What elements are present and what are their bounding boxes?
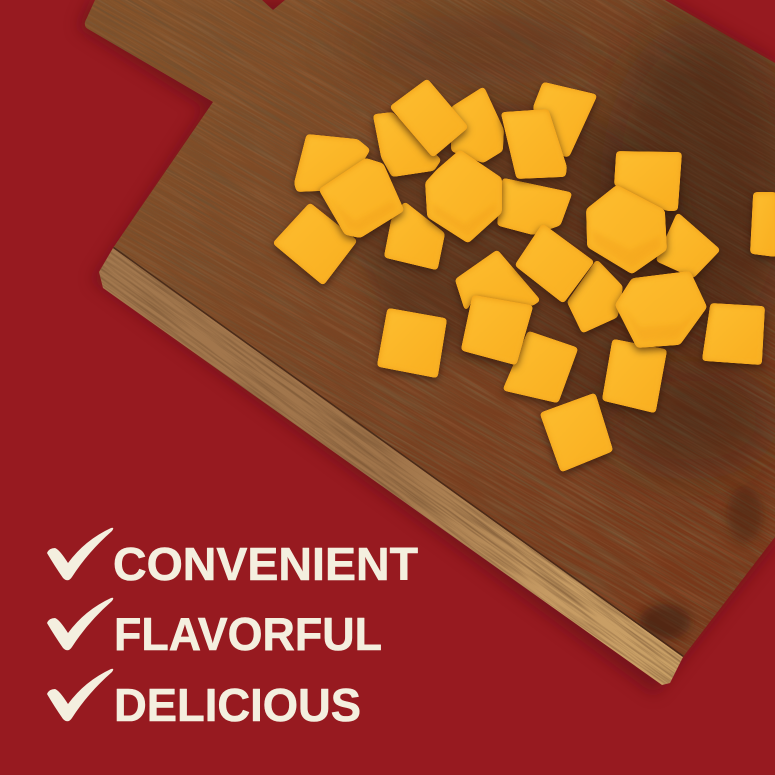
cube <box>427 152 500 241</box>
check list <box>47 528 418 731</box>
cube <box>517 226 592 301</box>
check mark: flavorful <box>47 598 113 650</box>
check mark: convenient <box>47 528 113 580</box>
cube <box>463 297 531 363</box>
cube <box>453 89 502 161</box>
check mark: delicious <box>47 669 113 721</box>
cube <box>503 111 565 177</box>
label: convenient: CONVENIENT <box>113 538 418 590</box>
board top surface <box>84 0 775 657</box>
cube <box>505 333 576 401</box>
cube <box>375 114 439 175</box>
cube <box>392 81 466 155</box>
cube <box>457 252 538 308</box>
label: delicious: DELICIOUS <box>114 679 361 731</box>
cube <box>296 136 368 190</box>
cube face shading <box>330 196 698 341</box>
cube <box>386 204 443 268</box>
cube <box>617 273 705 346</box>
cube <box>321 160 402 236</box>
label: flavorful: FLAVORFUL <box>114 608 382 660</box>
cube <box>588 187 665 272</box>
cube <box>658 215 718 276</box>
cube <box>379 310 445 376</box>
board side edge <box>99 248 683 685</box>
cube <box>752 194 775 255</box>
cube <box>604 341 665 411</box>
cube <box>569 262 621 331</box>
cutting board <box>84 0 775 685</box>
cube <box>542 395 611 470</box>
cube <box>535 84 595 155</box>
cube <box>616 153 680 209</box>
cube <box>275 205 355 283</box>
cube <box>499 180 570 233</box>
pile of cheese cubes <box>275 81 775 470</box>
cube <box>704 305 763 363</box>
